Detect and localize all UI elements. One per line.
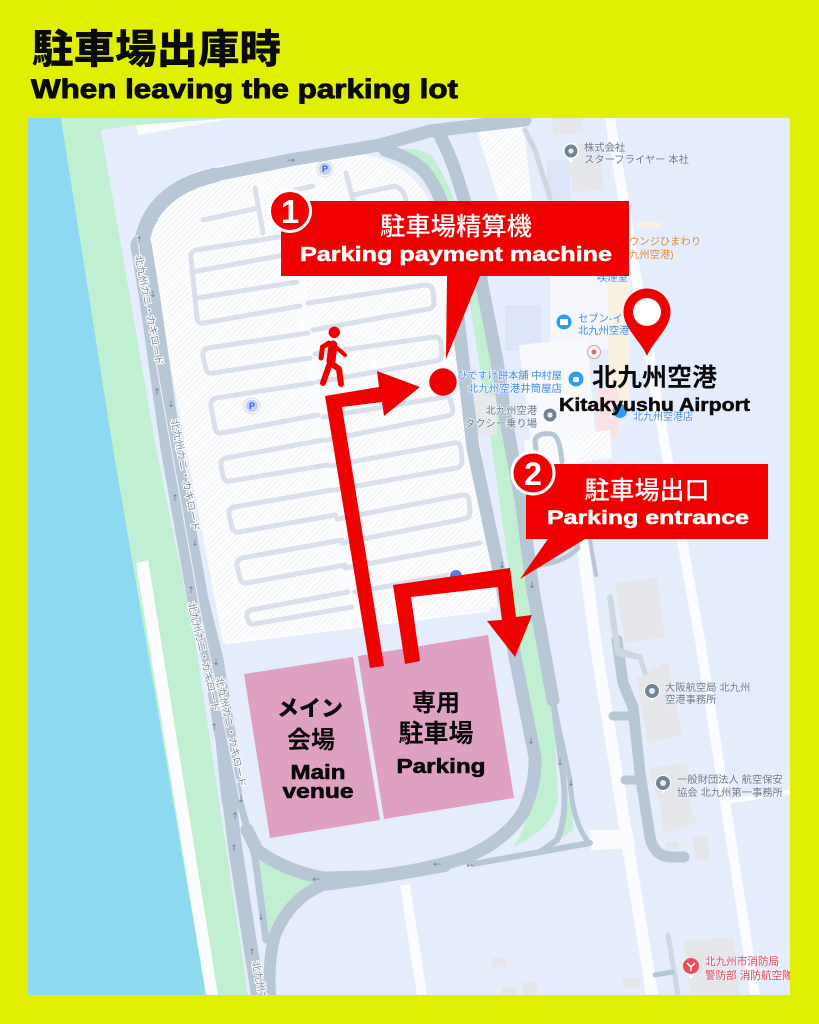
parking markers: P <box>322 164 328 174</box>
road direction arrows: ↑ <box>135 236 143 246</box>
callout: parking payment machine: 駐車場精算機 <box>380 213 532 241</box>
label: Kitakyushu Airport: Kitakyushu Airport <box>559 394 750 415</box>
callout: parking payment machine <box>270 190 629 359</box>
poi: Star Flyer head office: 株式会社 <box>584 141 625 154</box>
road direction arrows: ← <box>466 861 474 871</box>
poi: taxi stand: 北九州空港 <box>486 405 538 417</box>
south connector <box>270 866 445 995</box>
poi: airport shop: 北九州空港店 <box>633 411 693 423</box>
poi: Seven-Eleven <box>556 313 630 336</box>
poi: Star Flyer head office: スターフライヤー 本社 <box>584 153 689 166</box>
road direction arrows: ← <box>433 860 441 870</box>
road direction arrows: ↓ <box>212 658 220 668</box>
parking label: 駐車場 <box>398 720 474 748</box>
road direction arrows: ↑ <box>248 948 256 958</box>
road direction arrows: ↓ <box>257 913 265 923</box>
poi: Hiyoshi shop: 北九州空港井筒屋店 <box>468 382 562 395</box>
road direction arrows: ↑ <box>171 494 179 504</box>
road direction arrows: ↓ <box>191 539 199 549</box>
parking lot surface <box>151 154 497 643</box>
badge: number 1 <box>270 190 310 232</box>
poi: Star Flyer head office <box>563 141 689 166</box>
main venue label: venue <box>282 780 354 803</box>
poi: Seven-Eleven: 北九州空港 <box>578 325 630 337</box>
label: Kitakyushu Airport <box>559 364 750 415</box>
water <box>28 118 206 995</box>
road direction arrows: ↑ <box>210 723 218 733</box>
main venue label <box>277 696 354 803</box>
road direction arrows: ↓ <box>528 581 536 591</box>
road direction arrows: ↓ <box>527 737 535 747</box>
road direction arrows: ↑ <box>230 844 238 854</box>
poi: Osaka aviation bureau <box>644 681 750 706</box>
callout: parking payment machine: Parking payment machine <box>300 243 612 266</box>
white service strips <box>405 118 790 995</box>
poi: aviation safety association: 協会 北九州第一事務所 <box>677 786 783 799</box>
icon: pedestrian <box>321 327 345 384</box>
poi: smoking room: 喫煙室 <box>597 272 628 284</box>
perimeter road: north and west <box>215 120 525 175</box>
callout: parking entrance: 駐車場出口 <box>584 477 710 505</box>
poi: Seven-Eleven: セブン-イ <box>578 312 623 325</box>
parking markers <box>244 161 464 584</box>
road direction arrows: ↓ <box>167 400 175 410</box>
road labels: 北九州カニ・カキロード <box>213 676 248 788</box>
poi: Hiyoshi shop <box>457 369 584 395</box>
poi: lounge: ウンジひまわり <box>629 236 701 248</box>
road direction arrows: ↓ <box>149 290 157 300</box>
marker: parking payment machine location <box>429 368 457 396</box>
road direction arrows: ↑ <box>231 812 239 822</box>
parking label: 専用 <box>412 690 460 717</box>
road direction arrows: ↓ <box>556 758 564 768</box>
parking label: Parking <box>396 755 486 778</box>
badge: number 2: 2 <box>524 456 542 492</box>
terminal and buildings <box>475 118 740 995</box>
icon: airport pin <box>624 288 670 356</box>
main venue label: 会場 <box>287 727 335 754</box>
parking label <box>396 690 486 778</box>
poi: aviation safety association: 一般財団法人 航空保安 <box>677 773 783 786</box>
title <box>31 28 458 104</box>
road labels: 北九州カニ・カキロード <box>185 601 222 713</box>
poi: restaurant <box>588 346 600 358</box>
poi: Hiyoshi shop: ひですけ餅本舗 中村屋 <box>457 369 562 382</box>
title: English: When leaving the parking lot <box>31 74 458 104</box>
poi: aviation safety association <box>655 773 783 799</box>
point of interest labels <box>457 141 793 982</box>
road direction arrows: ↓ <box>498 561 506 571</box>
title: Japanese: 駐車場出庫時 <box>32 28 281 72</box>
road direction arrows: ← <box>312 875 320 885</box>
poi: lounge: 九州空港) <box>629 249 674 261</box>
road labels: 北九州カニ・カキロード <box>168 418 202 532</box>
poi: Osaka aviation bureau: 大阪航空局 北九州 <box>665 681 750 694</box>
road direction arrows: ↓ <box>237 795 245 805</box>
callout: parking entrance: Parking entrance <box>547 508 749 529</box>
poi: taxi stand <box>465 405 558 430</box>
poi: lounge <box>629 236 701 261</box>
road direction arrows: ↑ <box>153 388 161 398</box>
panel: parking block <box>358 635 514 819</box>
arrow: exit driving route <box>393 568 532 664</box>
road labels: 北九州カニ・カキロード <box>132 254 165 367</box>
road direction arrows: → <box>287 156 295 166</box>
road direction arrows: ↑ <box>187 586 195 596</box>
arrow: walking route to payment machine <box>325 371 420 668</box>
road direction arrows: ↓ <box>567 779 575 789</box>
road direction arrows <box>135 156 575 958</box>
label: Kitakyushu Airport: 北九州空港 <box>592 364 717 392</box>
badge: number 2 <box>512 452 554 494</box>
green verges <box>400 149 558 847</box>
parking lanes <box>191 173 490 643</box>
main venue label: メイン <box>277 696 343 721</box>
poi: Osaka aviation bureau: 空港事務所 <box>665 693 716 706</box>
service road east <box>617 640 684 857</box>
callout: parking entrance <box>512 452 768 579</box>
inner road along lot <box>247 150 535 878</box>
parking markers: P <box>249 401 255 411</box>
road labels <box>132 254 284 1024</box>
outer road along apron <box>438 132 553 700</box>
poi: airport shop <box>613 404 693 423</box>
badge: number 1: 1 <box>281 193 299 230</box>
poi: fire department: 北九州市消防局 <box>705 955 779 968</box>
poi: taxi stand: タクシー乗り場 <box>465 417 537 430</box>
main venue label: Main <box>290 761 346 784</box>
road network <box>137 120 684 995</box>
panel: main venue block <box>244 657 380 838</box>
poi: fire department: 警防部 消防航空隊 <box>705 969 793 982</box>
poi: fire department <box>683 955 793 982</box>
green coastal strip <box>61 118 248 995</box>
white coastal path <box>136 560 218 995</box>
